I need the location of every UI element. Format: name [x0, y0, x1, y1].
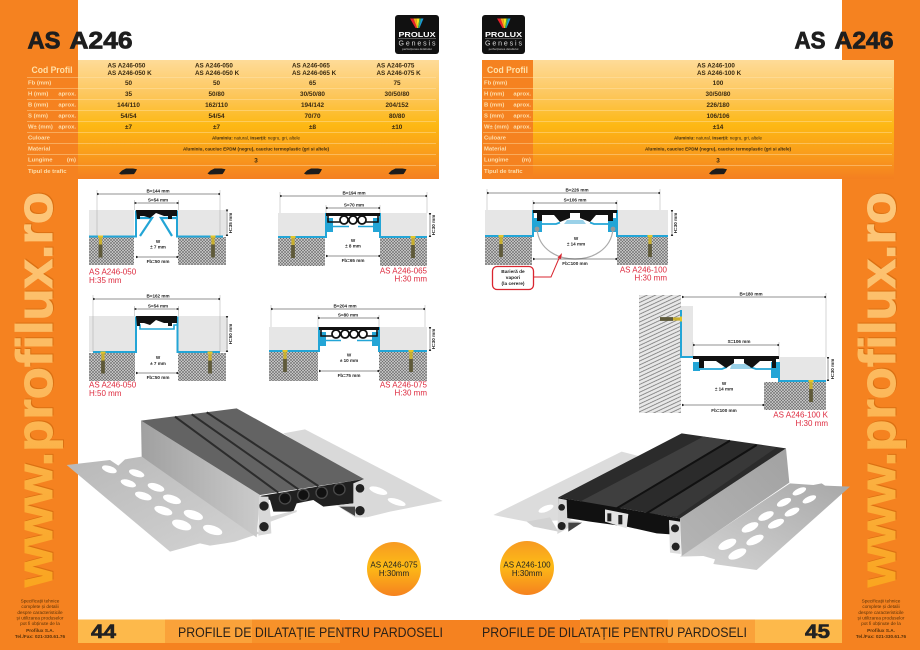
badge: AS A246-100 H:30mm: H:30mm: [512, 569, 542, 578]
spec table left: AS A246-050: [195, 62, 233, 70]
badge: AS A246-100 H:30mm: AS A246-100: [503, 560, 551, 570]
vertical website text left: www.profilux.ro: [6, 192, 63, 588]
cross-section drawing AS A246-100 H:30 mm: Fb=100 mm: [562, 261, 588, 266]
cross-section drawing AS A246-065 H:30 mm: Fb=65 mm: [342, 258, 364, 263]
spec table left: AS A246-050 K: [108, 70, 152, 77]
spec table left: H (mm): [28, 92, 48, 98]
cross-section drawing AS A246-065 H:30 mm: AS A246-065: [380, 266, 428, 276]
spec table left: aprox.: [58, 124, 76, 130]
cross-section drawing AS A246-075 H:30 mm: W: [347, 352, 352, 358]
spec table left: aprox.: [58, 114, 76, 120]
spec table right: 30/50/80: [706, 91, 731, 98]
spec table left: Culoare: [28, 136, 51, 142]
footer band right: [482, 620, 842, 643]
spec table right: W± (mm): [484, 124, 509, 130]
side note right: complete și detalii: [862, 604, 900, 609]
footer band left: [78, 620, 443, 643]
cross-section drawing AS A246-100 H:30 mm: S=106 mm: [564, 198, 586, 202]
badge: AS A246-100 H:30mm: [500, 541, 554, 595]
cross-section drawing AS A246-100 H:30 mm: H:30 mm: [635, 274, 667, 282]
cross-section drawing AS A246-050 H:50 mm: ± 7 mm: [150, 361, 166, 366]
cross-section drawing AS A246-050 H:50 mm: W: [156, 355, 161, 360]
cross-section drawing AS A246-100 H:30 mm: [485, 188, 678, 282]
spec table left: Fb (mm): [28, 80, 51, 86]
spec table right: 3: [716, 157, 720, 164]
cross-section drawing AS A246-050 H:35 mm: Fb=50 mm: [147, 259, 169, 264]
spec table left: 75: [393, 80, 401, 87]
spec table left: ±7: [125, 124, 132, 131]
spec table left: Tipul de trafic: [28, 169, 67, 175]
logo right: Prolux Genesis: Genesis: [485, 40, 522, 48]
callout: vapour barrier: vapori: [506, 275, 520, 281]
cross-section drawing AS A246-100 K H:30 mm: AS A246-100 K: [773, 410, 829, 420]
product photo: AS A246-075 grey joint profile: [67, 408, 443, 552]
cross-section drawing AS A246-100 K H:30 mm: W: [722, 381, 727, 386]
footer band left: 44: [91, 622, 117, 643]
spec table left: Aluminiu: natural, Inserții: negru, gri, altele: [212, 135, 301, 141]
title left: AS: [28, 28, 60, 54]
cross-section drawing AS A246-050 H:35 mm: H:35 mm: [89, 276, 122, 285]
spec table right: 100: [713, 80, 724, 87]
side note right: [856, 598, 906, 639]
spec table left: 54/54: [208, 113, 225, 120]
callout: vapour barrier: [492, 253, 562, 290]
product photo: AS A246-100 black joint profile: [493, 433, 850, 570]
spec table left: (m): [67, 158, 76, 164]
spec table left: 54/54: [120, 113, 137, 120]
cross-section drawing AS A246-075 H:30 mm: H=30 mm: [431, 329, 436, 349]
spec table left: ±10: [392, 124, 403, 131]
badge: AS A246-075 H:30mm: AS A246-075: [370, 560, 418, 570]
cross-section drawing AS A246-050 H:35 mm: B=144 mm: [146, 188, 170, 194]
spec table left: Aluminiu, cauciuc EPDM (negru), cauciuc termoplastic (gri si altele): [183, 146, 329, 151]
cross-section drawing AS A246-065 H:30 mm: W: [351, 238, 356, 243]
spec table right: aprox.: [513, 124, 531, 130]
spec table left: 194/142: [301, 102, 324, 109]
spec table left: ±7: [213, 124, 220, 131]
cross-section drawing AS A246-075 H:30 mm: Fb=75 mm: [338, 373, 360, 378]
spec table left: Material: [28, 146, 51, 152]
cross-section drawing AS A246-050 H:50 mm: H:50 mm: [89, 389, 122, 398]
spec table right: Culoare: [484, 136, 507, 142]
cross-section drawing AS A246-050 H:35 mm: H=35 mm: [228, 213, 233, 233]
cross-section drawing AS A246-065 H:30 mm: H:30 mm: [395, 274, 427, 284]
spec table left: 204/152: [385, 102, 409, 109]
spec table left: 30/50/80: [385, 91, 410, 98]
spec table left: 144/110: [117, 102, 140, 109]
spec table right: Lungime: [484, 158, 509, 164]
cross-section drawing AS A246-075 H:30 mm: ± 10 mm: [340, 358, 358, 363]
cross-section drawing AS A246-050 H:35 mm: AS A246-050: [89, 268, 137, 276]
spec table right: 226/180: [706, 102, 730, 109]
spec table right: [482, 60, 894, 179]
spec table right: B (mm): [484, 102, 504, 108]
spec table right: AS A246-100 K: [697, 70, 742, 77]
spec table right: aprox.: [513, 92, 531, 98]
side note right: despre caracteristicile: [858, 610, 904, 615]
side note left: [15, 598, 65, 639]
spec table right: AS A246-100: [697, 62, 735, 70]
cross-section drawing AS A246-075 H:30 mm: S=80 mm: [338, 312, 358, 318]
spec table right: Material: [484, 146, 507, 152]
spec table left: aprox.: [58, 102, 76, 108]
cross-section drawing AS A246-075 H:30 mm: H:30 mm: [395, 388, 427, 398]
cross-section drawing AS A246-050 H:50 mm: [89, 294, 233, 398]
cross-section drawing AS A246-100 H:30 mm: W: [574, 236, 579, 241]
cross-section drawing AS A246-050 H:50 mm: AS A246-050: [89, 380, 137, 390]
logo left: Prolux Genesis: PROLUX: [398, 30, 436, 39]
spec table left: 50/80: [208, 91, 225, 98]
side note left: și utilizarea produselor: [17, 616, 64, 620]
footer band left: PROFILE DE DILATAȚIE PENTRU PARDOSELI: [178, 624, 443, 640]
spec table left: AS A246-050 K: [195, 70, 240, 77]
cross-section drawing AS A246-050 H:35 mm: ± 7 mm: [150, 244, 166, 250]
side note right: pot fi obținute de la: [861, 621, 901, 626]
badge: AS A246-075 H:30mm: [367, 542, 421, 596]
spec table right: H (mm): [484, 92, 504, 98]
callout: vapour barrier: (la cerere): [502, 281, 525, 287]
cross-section drawing AS A246-050 H:50 mm: S=54 mm: [148, 304, 168, 308]
side note left: Specificații tehnice: [21, 598, 60, 604]
cross-section drawing AS A246-100 K H:30 mm: Fb=100 mm: [711, 408, 737, 413]
logo right: Prolux Genesis: perfecțiunea detaliului: [489, 47, 519, 51]
spec table left: AS A246-075 K: [376, 70, 421, 77]
white page area right: [460, 0, 842, 620]
cross-section drawing AS A246-075 H:30 mm: B=204 mm: [333, 304, 357, 308]
spec table right: 106/106: [706, 113, 730, 120]
spec table left: 35: [125, 91, 132, 98]
spec table left: Lungime: [28, 158, 53, 164]
badge: AS A246-075 H:30mm: H:30mm: [379, 569, 409, 578]
spec table left: AS A246-075: [376, 62, 415, 70]
logo right: Prolux Genesis: PROLUX: [485, 30, 522, 39]
spec table left: 50: [125, 80, 132, 87]
spec table left: Cod Profil: [32, 65, 72, 75]
spec table left: 65: [309, 80, 316, 87]
side note left: pot fi obținute de la: [20, 621, 60, 626]
spec table left: 3: [254, 157, 258, 164]
cross-section drawing AS A246-100 H:30 mm: H=30 mm: [673, 213, 678, 233]
spec table left: B (mm): [28, 102, 48, 108]
cross-section drawing AS A246-100 K H:30 mm: ± 14 mm: [715, 386, 733, 392]
cross-section drawing AS A246-065 H:30 mm: S=70 mm: [344, 202, 364, 208]
spec table left: S (mm): [28, 114, 48, 120]
spec table right: Tipul de trafic: [484, 169, 523, 175]
white page area left: [78, 0, 460, 620]
title right: AS: [794, 28, 826, 54]
spec table right: Cod Profil: [487, 65, 528, 75]
spec table right: Aluminiu, cauciuc EPDM (negru), cauciuc termoplastic (gri si altele): [645, 146, 791, 151]
cross-section drawing AS A246-050 H:50 mm: B=162 mm: [146, 294, 170, 298]
cross-section drawing AS A246-100 K H:30 mm: B=180 mm: [739, 292, 763, 296]
side note left: Tel./Fax: 021-330.61.76: [15, 634, 65, 639]
spec table left: 50: [213, 80, 220, 87]
cross-section drawing AS A246-050 H:35 mm: S=54 mm: [148, 198, 168, 202]
spec table left: AS A246-050: [108, 62, 146, 70]
vertical website text right: www.profilux.ro: [849, 192, 906, 588]
side note right: Tel./Fax: 021-330.61.76: [856, 634, 906, 639]
cross-section drawing AS A246-075 H:30 mm: [269, 304, 436, 398]
logo left: Prolux Genesis: [395, 15, 439, 54]
side note right: Specificații tehnice: [862, 598, 901, 604]
side note right: și utilizarea produselor: [858, 616, 905, 620]
cross-section drawing AS A246-100 H:30 mm: AS A246-100: [620, 266, 668, 274]
title left: A246: [70, 28, 132, 54]
spec table left: ±8: [309, 124, 316, 131]
cross-section drawing AS A246-050 H:50 mm: Fb=50 mm: [147, 375, 169, 380]
spec table right: aprox.: [513, 114, 531, 120]
spec table left: AS A246-065: [292, 62, 330, 70]
footer band right: PROFILE DE DILATAȚIE PENTRU PARDOSELI: [482, 624, 747, 640]
cross-section drawing AS A246-050 H:50 mm: H=50 mm: [228, 324, 233, 344]
spec table right: (m): [522, 158, 531, 164]
side note right: Profilux S.A.: [867, 628, 895, 633]
logo right: Prolux Genesis: [482, 15, 525, 54]
cross-section drawing AS A246-065 H:30 mm: [278, 190, 436, 284]
logo left: Prolux Genesis: perfecțiunea detaliului: [402, 47, 432, 51]
cross-section drawing AS A246-065 H:30 mm: ± 8 mm: [345, 244, 361, 248]
side note left: Profilux S.A.: [26, 628, 54, 633]
cross-section drawing AS A246-100 K H:30 mm: S=106 mm: [728, 339, 750, 344]
side note left: despre caracteristicile: [17, 610, 63, 615]
spec table left: W± (mm): [28, 124, 53, 130]
spec table left: 162/110: [205, 102, 228, 109]
cross-section drawing AS A246-065 H:30 mm: B=194 mm: [342, 190, 366, 196]
cross-section drawing AS A246-075 H:30 mm: AS A246-075: [380, 380, 428, 390]
logo left: Prolux Genesis: Genesis: [398, 40, 436, 48]
spec table right: ±14: [713, 124, 724, 131]
cross-section drawing AS A246-050 H:35 mm: [89, 188, 233, 285]
spec table left: [26, 60, 439, 179]
cross-section drawing AS A246-050 H:35 mm: W: [156, 239, 161, 244]
spec table left: 30/50/80: [300, 91, 325, 98]
side note left: complete și detalii: [21, 604, 59, 609]
footer band right: 45: [805, 622, 831, 643]
callout: vapour barrier: Barieră de: [501, 269, 525, 275]
cross-section drawing AS A246-100 H:30 mm: ± 14 mm: [567, 242, 585, 246]
spec table left: AS A246-065 K: [292, 70, 337, 77]
cross-section drawing AS A246-100 K H:30 mm: H:30 mm: [796, 419, 828, 428]
cross-section drawing AS A246-065 H:30 mm: H=30 mm: [431, 215, 436, 235]
spec table left: 80/80: [389, 113, 405, 120]
spec table left: 70/70: [304, 113, 321, 120]
spec table right: aprox.: [513, 102, 531, 108]
cross-section drawing AS A246-100 H:30 mm: B=226 mm: [565, 188, 589, 192]
cross-section drawing AS A246-100 K H:30 mm: [639, 292, 835, 428]
spec table right: Fb (mm): [484, 80, 507, 86]
spec table left: aprox.: [58, 92, 76, 98]
spec table right: S (mm): [484, 114, 504, 120]
cross-section drawing AS A246-100 K H:30 mm: H=30 mm: [830, 359, 835, 379]
spec table right: Aluminiu: natural, Inserții: negru, gri, altele: [674, 135, 763, 141]
title right: A246: [834, 28, 894, 54]
